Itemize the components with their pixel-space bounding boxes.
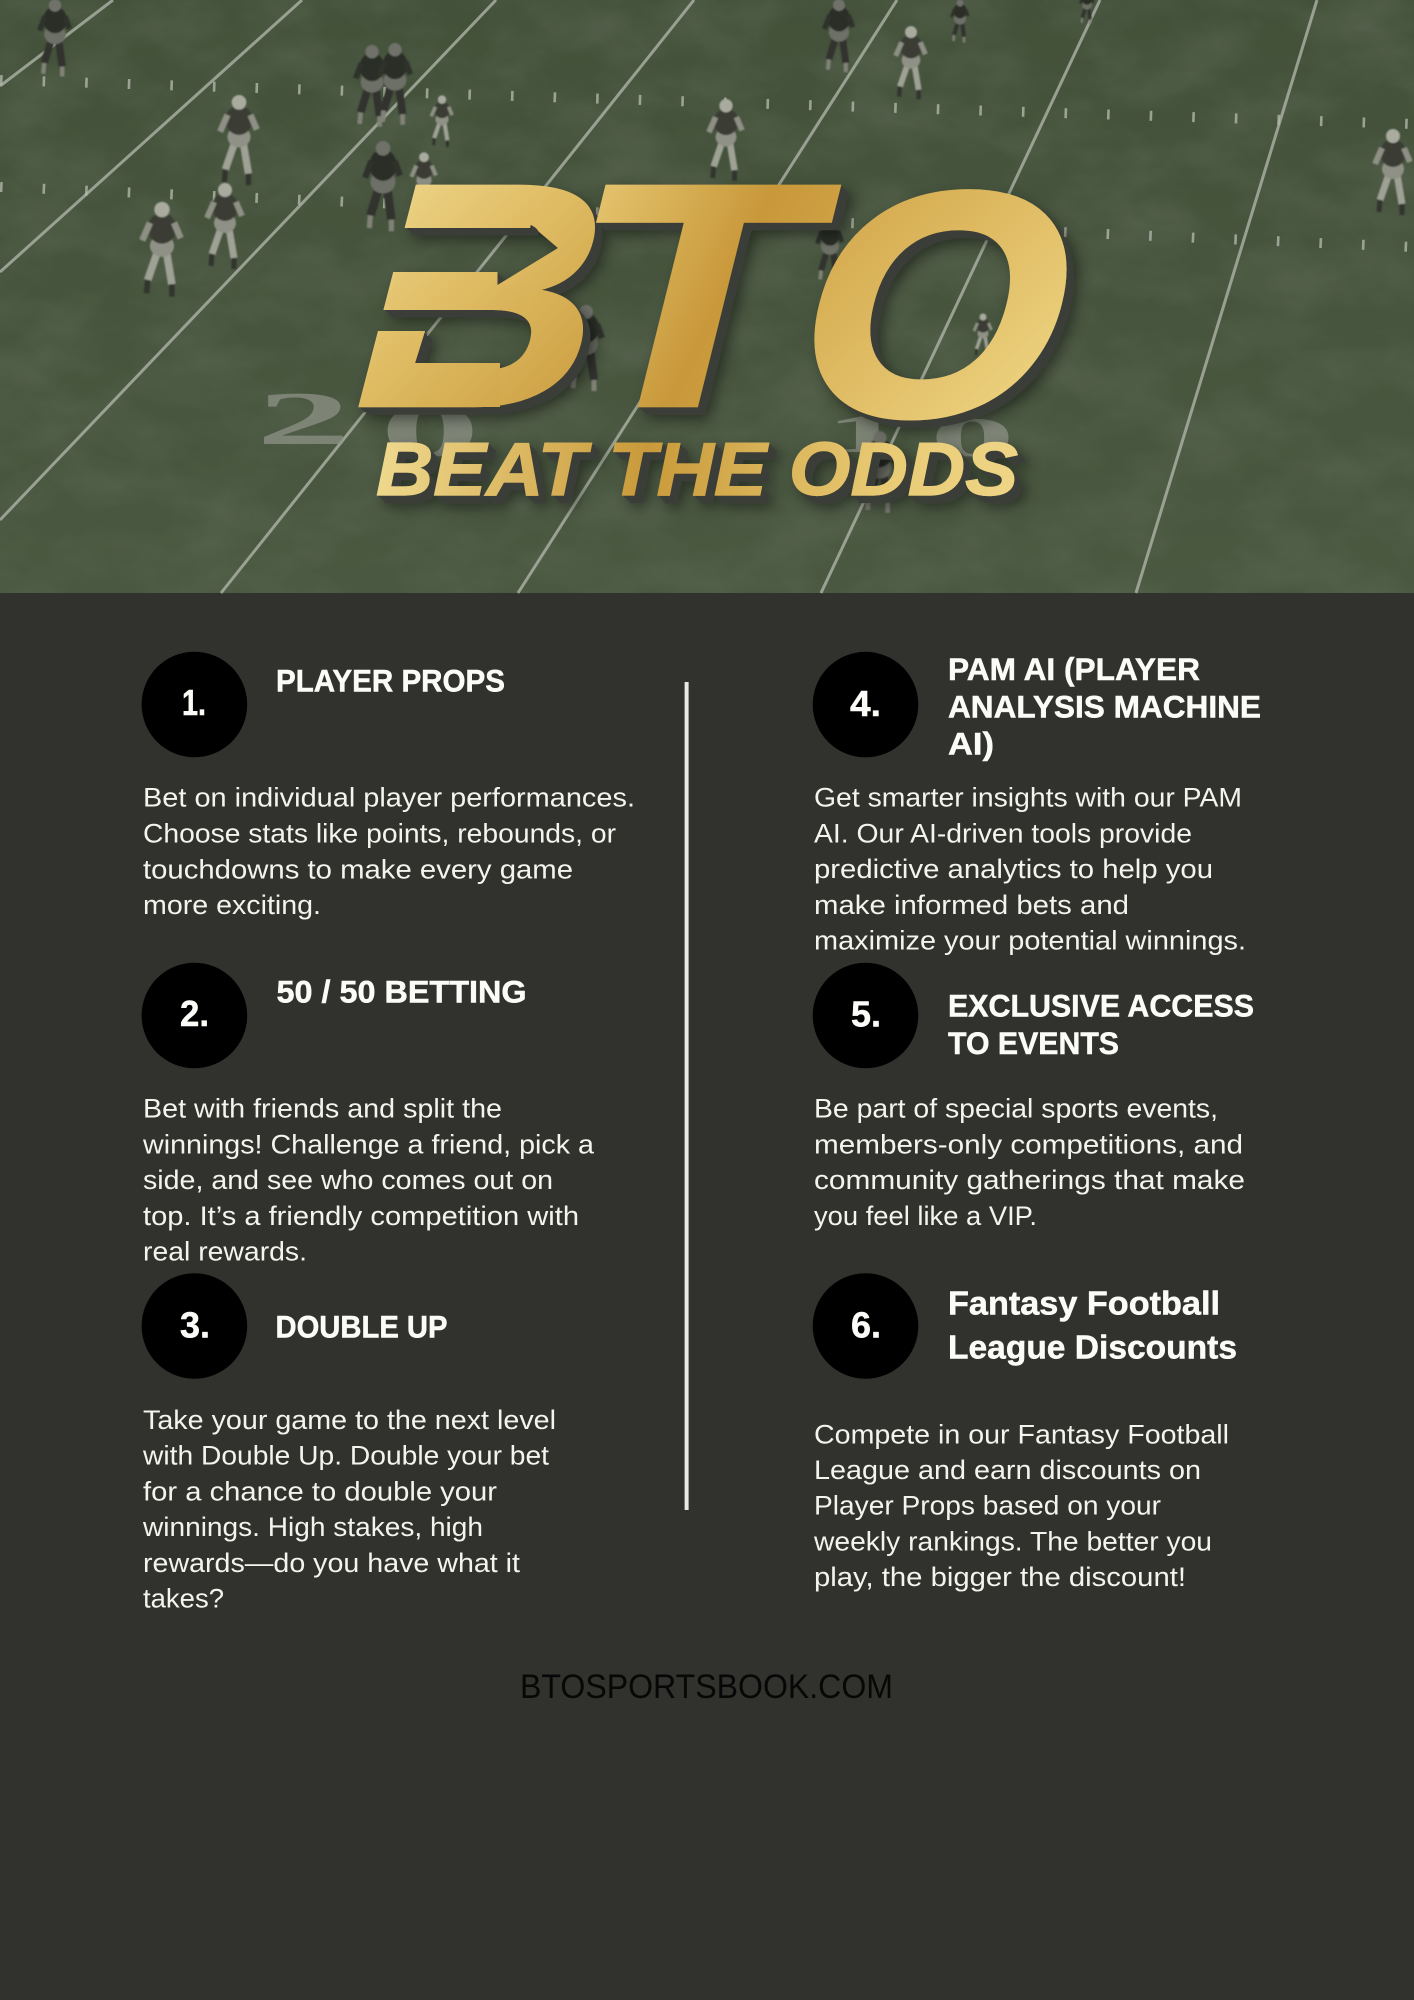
heading 4: PAM AI (PLAYER [948, 651, 1200, 687]
body 5 [814, 1094, 1245, 1231]
badge 1 [142, 652, 247, 757]
panel: 5 exclusive access [813, 963, 1254, 1231]
body 3 [142, 1405, 556, 1614]
body 2: side, and see who comes out on [143, 1165, 553, 1195]
body 3: Take your game to the next level [143, 1405, 556, 1435]
body 6: play, the bigger the discount! [814, 1562, 1186, 1592]
heading 5: EXCLUSIVE ACCESS [948, 988, 1254, 1024]
badge 5: 5. [851, 994, 881, 1035]
heading 3: DOUBLE UP [276, 1308, 448, 1344]
footer website: BTOSPORTSBOOK.COM [520, 1668, 893, 1706]
badge 2: 2. [180, 993, 209, 1034]
body 2: winnings! Challenge a friend, pick a [142, 1129, 595, 1159]
badge 3: 3. [180, 1304, 210, 1345]
badge 1: 1. [182, 682, 206, 723]
players [40, 0, 1410, 513]
field numbers: 0 [930, 407, 1015, 469]
panel: 3 double up [142, 1273, 556, 1614]
body 2: real rewards. [143, 1237, 307, 1267]
badge 4: 4. [850, 683, 881, 724]
field numbers: 2 [256, 377, 351, 461]
panel: 2 50/50 betting [142, 963, 595, 1267]
heading 4: AI) [948, 726, 994, 762]
heading 5: TO EVENTS [948, 1025, 1119, 1061]
panel: football field hero [0, 0, 1414, 593]
body 5: members-only competitions, and [814, 1129, 1243, 1159]
logo: BTO: O [763, 126, 1118, 484]
body 1 [143, 783, 635, 920]
heading 4 [948, 651, 1261, 762]
body 1: Choose stats like points, rebounds, or [143, 818, 616, 848]
body 3: rewards—do you have what it [143, 1548, 521, 1578]
panel: 1 player props [142, 652, 635, 920]
badge 5 [813, 963, 918, 1068]
body 1: Bet on individual player performances. [143, 783, 635, 813]
body 4: AI. Our AI-driven tools provide [814, 818, 1192, 848]
body 2 [142, 1094, 595, 1267]
body 3: takes? [143, 1584, 224, 1614]
badge 6 [813, 1273, 918, 1379]
body 4 [814, 783, 1246, 956]
heading 2: 50 / 50 BETTING [276, 974, 526, 1010]
body 3: for a chance to double your [143, 1476, 497, 1506]
body 5: community gatherings that make [814, 1165, 1245, 1195]
divider [685, 682, 689, 1510]
body 1: touchdowns to make every game [143, 854, 573, 884]
heading 5 [948, 988, 1254, 1061]
badge 6: 6. [851, 1304, 881, 1345]
body 5: Be part of special sports events, [814, 1094, 1218, 1124]
body 6: Compete in our Fantasy Football [814, 1419, 1229, 1449]
panel: 4 PAM AI [813, 651, 1261, 956]
heading 6 [948, 1284, 1237, 1365]
body 4: make informed bets and [814, 890, 1129, 920]
body 6: weekly rankings. The better you [813, 1526, 1212, 1556]
badge 2 [142, 963, 247, 1068]
field numbers: 0 [380, 389, 480, 473]
heading 6: Fantasy Football [948, 1284, 1220, 1321]
heading 6: League Discounts [948, 1328, 1237, 1365]
heading 4: ANALYSIS MACHINE [948, 688, 1261, 724]
body 4: maximize your potential winnings. [814, 926, 1246, 956]
logo tagline: BEAT THE ODDS [376, 428, 1018, 512]
logo: BTO: B [317, 117, 652, 474]
body 4: predictive analytics to help you [814, 854, 1213, 884]
body 4: Get smarter insights with our PAM [814, 783, 1242, 813]
body 6 [813, 1419, 1229, 1592]
body 5: you feel like a VIP. [814, 1201, 1037, 1231]
logo: BTO [358, 183, 1084, 438]
badge 3 [142, 1273, 247, 1379]
body 6: Player Props based on your [814, 1491, 1161, 1521]
field numbers [256, 377, 1015, 473]
field numbers: 1 [825, 403, 905, 465]
body 2: Bet with friends and split the [143, 1094, 502, 1124]
panel: 6 fantasy football [813, 1273, 1237, 1592]
body 6: League and earn discounts on [814, 1455, 1201, 1485]
body 2: top. It’s a friendly competition with [143, 1201, 579, 1231]
logo: BTO: T [530, 118, 861, 475]
body 1: more exciting. [143, 890, 321, 920]
body 3: winnings. High stakes, high [142, 1512, 483, 1542]
body 3: with Double Up. Double your bet [142, 1441, 550, 1471]
heading 1: PLAYER PROPS [276, 663, 505, 699]
badge 4 [813, 652, 918, 757]
